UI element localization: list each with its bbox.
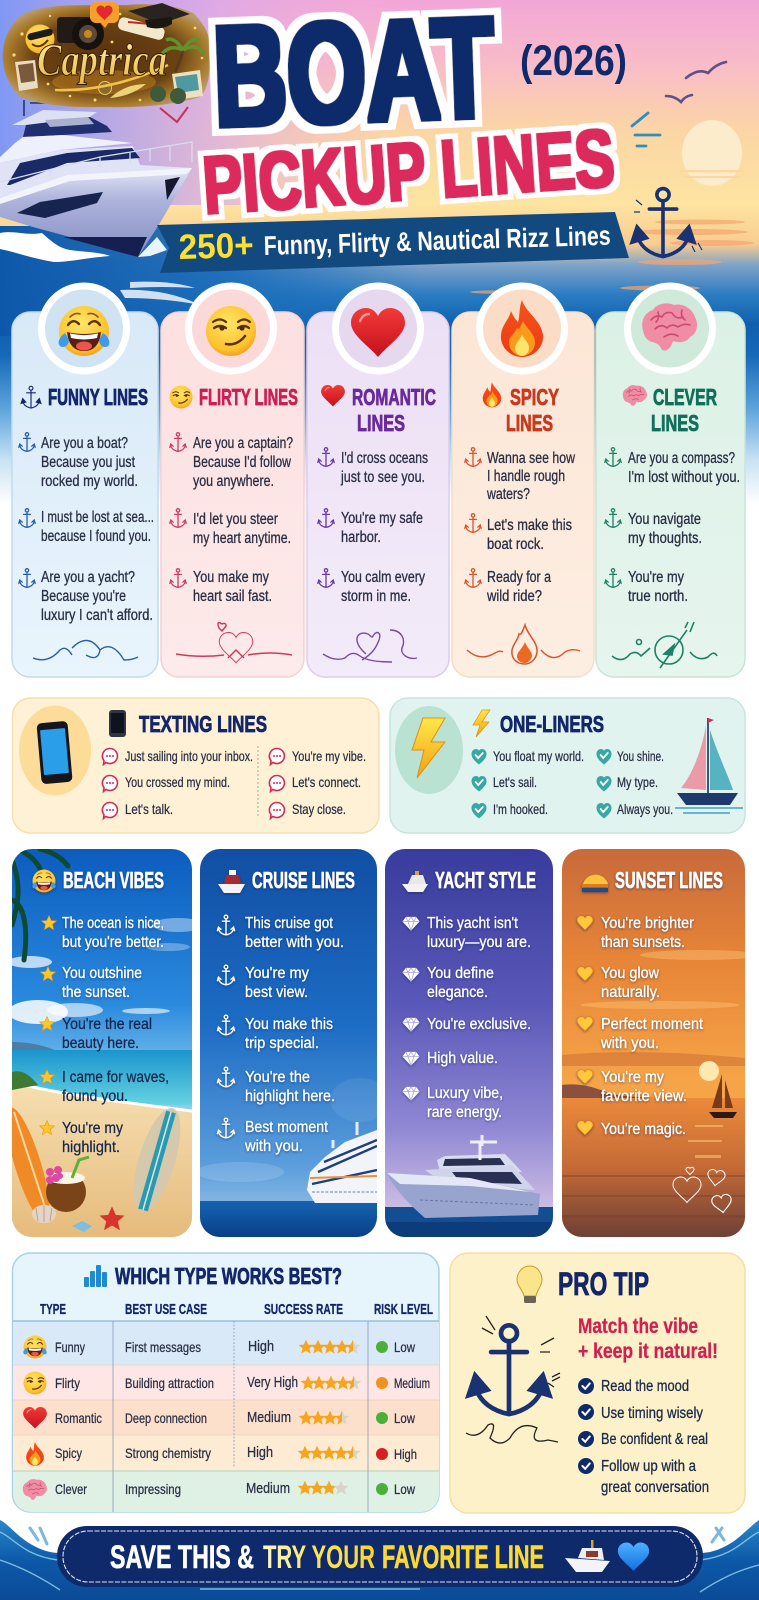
list: cruise lines: You make this [245, 1016, 333, 1033]
icon: light bulb [517, 1266, 542, 1303]
list: flirty lines [170, 433, 293, 605]
year label: (2026) [520, 37, 627, 85]
table row: flirty: Very High [247, 1374, 298, 1391]
list: texting lines: Let's connect. [292, 774, 361, 790]
text: beach lines: highlight. [62, 1139, 120, 1156]
heading: pro tip: PRO TIP [558, 1266, 649, 1302]
list: sunset lines: You're magic. [601, 1121, 686, 1138]
list: clever lines: You're my [628, 569, 684, 586]
table row: flirty: Building attraction [125, 1375, 214, 1391]
panel: yacht style [385, 849, 553, 1237]
tagline: Match the vibe [578, 1314, 698, 1338]
text: beach lines: beauty here. [62, 1035, 139, 1052]
logo wordmark: Captrica [37, 34, 167, 85]
heading: spicy lines [483, 382, 559, 436]
table header [40, 1301, 433, 1318]
list: romantic lines: You calm every [341, 569, 425, 586]
list: yacht style: elegance. [427, 984, 488, 1001]
list: sunset lines: You're brighter [601, 915, 694, 932]
panel: clever lines [596, 282, 745, 677]
doodle: waves [33, 640, 138, 660]
list: romantic lines [318, 448, 428, 605]
list: spicy lines: waters? [486, 486, 530, 503]
list: one-liners: I'm hooked. [493, 801, 548, 817]
icon: sailboat [675, 718, 743, 813]
icon: smirking face badge [185, 282, 277, 374]
checklist: great conversation [601, 1479, 709, 1496]
list: flirty lines: You make my [193, 569, 269, 586]
panel: funny lines [12, 282, 158, 677]
cruise scene [196, 849, 390, 1237]
icon: anchor illustration [469, 1316, 560, 1414]
hero background: sunset sky and ocean [0, 0, 759, 505]
ribbon text: Funny, Flirty & Nautical Rizz Lines [263, 221, 611, 261]
list: flirty lines: I'd let you steer [193, 511, 278, 528]
list: spicy lines [465, 448, 576, 605]
list: sunset lines: naturally. [601, 984, 660, 1001]
text: beach lines: You outshine [62, 965, 142, 982]
list: funny lines: Because you just [41, 454, 136, 471]
icon: fire badge [476, 282, 568, 374]
heading: romantic lines: ROMANTIC [352, 384, 436, 410]
table header: RISK LEVEL [374, 1301, 433, 1318]
list: texting lines: You crossed my mind. [125, 774, 230, 790]
list: clever lines: my thoughts. [628, 530, 702, 547]
list: yacht style: Luxury vibe, [427, 1085, 503, 1102]
banner text: SAVE THIS & [110, 1539, 254, 1575]
list: funny lines [19, 433, 154, 624]
table row: clever: Impressing [125, 1481, 181, 1497]
panel: which type works best table [12, 1253, 439, 1512]
list: romantic lines: storm in me. [341, 588, 411, 605]
panel: spicy lines [452, 282, 594, 677]
checklist: Follow up with a [601, 1458, 696, 1475]
list: one-liners [472, 748, 673, 818]
heading: texting lines: TEXTING LINES [139, 711, 267, 737]
table row: romantic: Deep connection [125, 1410, 207, 1426]
panel: sunset lines [562, 849, 759, 1237]
heading: funny lines [21, 384, 148, 410]
table row: flirty: Flirty [55, 1375, 80, 1391]
list: spicy lines: Wanna see how [487, 450, 576, 467]
list: funny lines: Are you a boat? [41, 435, 128, 452]
yacht scene [385, 849, 553, 1237]
heart outline behind logo [160, 107, 188, 122]
icon: lightning bolt illustration [395, 706, 463, 794]
heading: funny lines: FUNNY LINES [48, 384, 148, 410]
list: spicy lines: Ready for a [487, 569, 551, 586]
list: sunset lines [577, 915, 704, 1138]
heading: clever lines: LINES [651, 410, 699, 436]
icon: phone illustration [19, 706, 91, 796]
doodle: compass and waves [612, 622, 717, 668]
icon: red heart badge [332, 282, 424, 374]
list: cruise lines: This cruise got [245, 915, 334, 932]
list: funny lines: Because you're [41, 588, 126, 605]
icon: bar chart [84, 1265, 107, 1287]
list: flirty lines: my heart anytime. [193, 530, 291, 547]
heading: one-liners: ONE-LINERS [500, 711, 604, 737]
list: one-liners: My type. [617, 774, 658, 790]
checklist: Be confident & real [601, 1431, 708, 1448]
heading: clever lines [623, 384, 717, 436]
motion dashes [632, 113, 660, 146]
table row: clever [23, 1479, 416, 1500]
table row: flirty [24, 1372, 430, 1394]
list: funny lines: luxury I can't afford. [41, 607, 153, 624]
list: cruise lines: You're the [245, 1069, 310, 1086]
bottom waves [0, 1520, 759, 1600]
text: beach lines: The ocean is nice, [62, 915, 164, 932]
table row: funny [23, 1336, 416, 1358]
heading: clever lines: CLEVER [653, 384, 717, 410]
heading: beach vibes [32, 867, 164, 893]
heading: yacht style: YACHT STYLE [435, 867, 536, 893]
list: sunset lines: favorite view. [601, 1088, 687, 1105]
table row: funny: First messages [125, 1339, 201, 1355]
banner text: FAVORITE LINE [382, 1539, 544, 1575]
sunset scene [562, 849, 759, 1237]
logo heart bubble [90, 2, 119, 28]
heading: romantic lines [321, 384, 436, 436]
heading: spicy lines: LINES [506, 410, 553, 436]
panel: pro tip [450, 1253, 745, 1513]
list: sunset lines: with you. [600, 1035, 659, 1052]
list: cruise lines: best view. [245, 984, 308, 1001]
list: texting lines: Stay close. [292, 801, 346, 817]
logo emoji [26, 24, 54, 54]
list: funny lines: I must be lost at sea... [41, 509, 154, 526]
table row: funny: Low [394, 1339, 416, 1355]
list: sunset lines: Perfect moment [601, 1016, 704, 1033]
list: yacht style: You define [427, 965, 494, 982]
table row: spicy: High [394, 1446, 417, 1462]
table row: funny: Funny [55, 1339, 85, 1355]
heading: spicy lines: SPICY [510, 384, 559, 410]
list: texting lines: You're my vibe. [292, 748, 366, 764]
icon: anchor top right [632, 189, 702, 257]
heading: one-liners [473, 710, 604, 737]
text: beach lines: but you're better. [62, 934, 164, 951]
logo scroll and cap [117, 3, 190, 41]
list: cruise lines: You're my [245, 965, 309, 982]
checklist [578, 1378, 709, 1496]
list: texting lines: Just sailing into your inbox. [125, 748, 253, 764]
heading: yacht style [402, 867, 536, 893]
table row: clever: Low [394, 1481, 416, 1497]
list: yacht style: High value. [427, 1050, 498, 1067]
tagline: + keep it natural! [578, 1339, 718, 1363]
doodle: heart swirl [323, 630, 417, 662]
table row: clever: Clever [55, 1481, 87, 1497]
hardtop [12, 110, 97, 125]
list: yacht style: This yacht isn't [427, 915, 519, 932]
list: yacht style: You're exclusive. [427, 1016, 531, 1033]
seagulls [666, 62, 726, 102]
list: romantic lines: harbor. [341, 529, 381, 546]
text: beach lines: the sunset. [62, 984, 130, 1001]
icon: blue heart [618, 1542, 649, 1571]
table row: romantic [23, 1407, 416, 1429]
icon: boat [565, 1540, 610, 1572]
table row: spicy: High [247, 1444, 273, 1461]
list: spicy lines: I handle rough [487, 468, 565, 485]
list: clever lines: You navigate [628, 511, 701, 528]
list: cruise lines: trip special. [245, 1035, 319, 1052]
heading: flirty lines: FLIRTY LINES [199, 384, 298, 410]
list: sunset lines: You're my [601, 1069, 664, 1086]
panel: flirty lines [161, 282, 304, 677]
heading: which type works best: WHICH TYPE WORKS BEST? [115, 1263, 342, 1289]
icon: outline hearts [673, 1167, 733, 1214]
text: beach lines: I came for waves, [62, 1069, 169, 1086]
text: beach lines: You're the real [62, 1016, 152, 1033]
list: spicy lines: wild ride? [486, 588, 542, 605]
heading: cruise lines: CRUISE LINES [252, 867, 355, 893]
ribbon count: 250+ [178, 226, 254, 267]
panel: cruise lines [196, 849, 390, 1237]
table row: romantic: Medium [247, 1409, 291, 1426]
subtitle ribbon [157, 212, 629, 273]
list: spicy lines: boat rock. [487, 536, 544, 553]
doodle: heart on a line [176, 623, 292, 663]
panel: beach vibes [12, 849, 192, 1237]
list: cruise lines [217, 915, 344, 1155]
panel: romantic lines [307, 282, 449, 677]
beach scene [12, 849, 192, 1237]
heading: flirty lines [170, 384, 298, 410]
table header: SUCCESS RATE [264, 1301, 343, 1318]
list: cruise lines: highlight here. [245, 1088, 335, 1105]
logo: Captrica [3, 2, 210, 107]
list: funny lines: rocked my world. [41, 473, 138, 490]
panel: one-liners [390, 698, 745, 833]
heading: beach vibes: BEACH VIBES [63, 867, 164, 893]
heading: sunset lines [582, 867, 723, 893]
list: yacht style: luxury—you are. [427, 934, 531, 951]
list: romantic lines: I'd cross oceans [341, 450, 428, 467]
table row: spicy: Spicy [55, 1445, 82, 1461]
list: yacht style [402, 915, 531, 1121]
list: flirty lines: you anywhere. [193, 473, 274, 490]
text: beach lines: You're my [62, 1120, 123, 1137]
list: one-liners: Let's sail. [493, 774, 537, 790]
text: beach lines: found you. [62, 1088, 128, 1105]
panel: texting lines [12, 698, 379, 833]
table row: romantic: Low [394, 1410, 416, 1426]
table row: clever: Medium [246, 1480, 290, 1497]
banner text [110, 1539, 544, 1575]
text: beach lines [62, 915, 169, 1156]
table row: funny: High [248, 1338, 274, 1355]
list: beach stars [40, 916, 56, 1135]
table row: spicy [26, 1442, 417, 1466]
list: cruise lines: with you. [244, 1138, 303, 1155]
call to action banner [57, 1526, 703, 1587]
list: sunset lines: than sunsets. [601, 934, 685, 951]
list: flirty lines: Are you a captain? [193, 435, 293, 452]
list: flirty lines: heart sail fast. [193, 588, 272, 605]
icon: brain badge [624, 282, 716, 374]
heading: romantic lines: LINES [357, 410, 405, 436]
yacht illustration [0, 100, 192, 262]
list: funny lines: Are you a yacht? [41, 569, 135, 586]
list: clever lines [605, 448, 740, 605]
heading: texting lines [109, 710, 267, 737]
logo camera [57, 17, 104, 50]
list: one-liners: Always you. [617, 801, 673, 817]
table header: TYPE [40, 1301, 66, 1318]
list: clever lines: true north. [628, 588, 688, 605]
list: one-liners: You float my world. [493, 748, 584, 764]
logo palm and photos [15, 39, 204, 104]
list: spicy lines: Let's make this [487, 517, 572, 534]
tagline [578, 1314, 718, 1363]
table row backgrounds [13, 1321, 439, 1512]
checklist: Read the mood [601, 1378, 689, 1395]
list: yacht style: rare energy. [427, 1104, 502, 1121]
list: texting lines [102, 748, 366, 818]
list: cruise lines: better with you. [245, 934, 344, 951]
table header: BEST USE CASE [125, 1301, 207, 1318]
doodle: flame and waves [467, 625, 580, 664]
table row: romantic: Romantic [55, 1410, 102, 1426]
list: sunset lines: You glow [601, 965, 660, 982]
list: cruise lines: Best moment [245, 1119, 329, 1136]
table row: flirty: Medium [394, 1375, 430, 1391]
list: funny lines: because I found you. [41, 528, 151, 545]
banner text: TRY YOUR [263, 1539, 375, 1575]
doodle: wave [466, 1424, 558, 1443]
icon: laughing face badge [38, 282, 130, 374]
table row: spicy: Strong chemistry [125, 1445, 211, 1461]
list: romantic lines: You're my safe [341, 510, 423, 527]
heading: cruise lines [218, 867, 355, 893]
list: romantic lines: just to see you. [340, 469, 425, 486]
checklist: Use timing wisely [601, 1405, 703, 1422]
list: flirty lines: Because I'd follow [193, 454, 292, 471]
list: texting lines: Let's talk. [125, 801, 173, 817]
list: one-liners: You shine. [617, 748, 664, 764]
